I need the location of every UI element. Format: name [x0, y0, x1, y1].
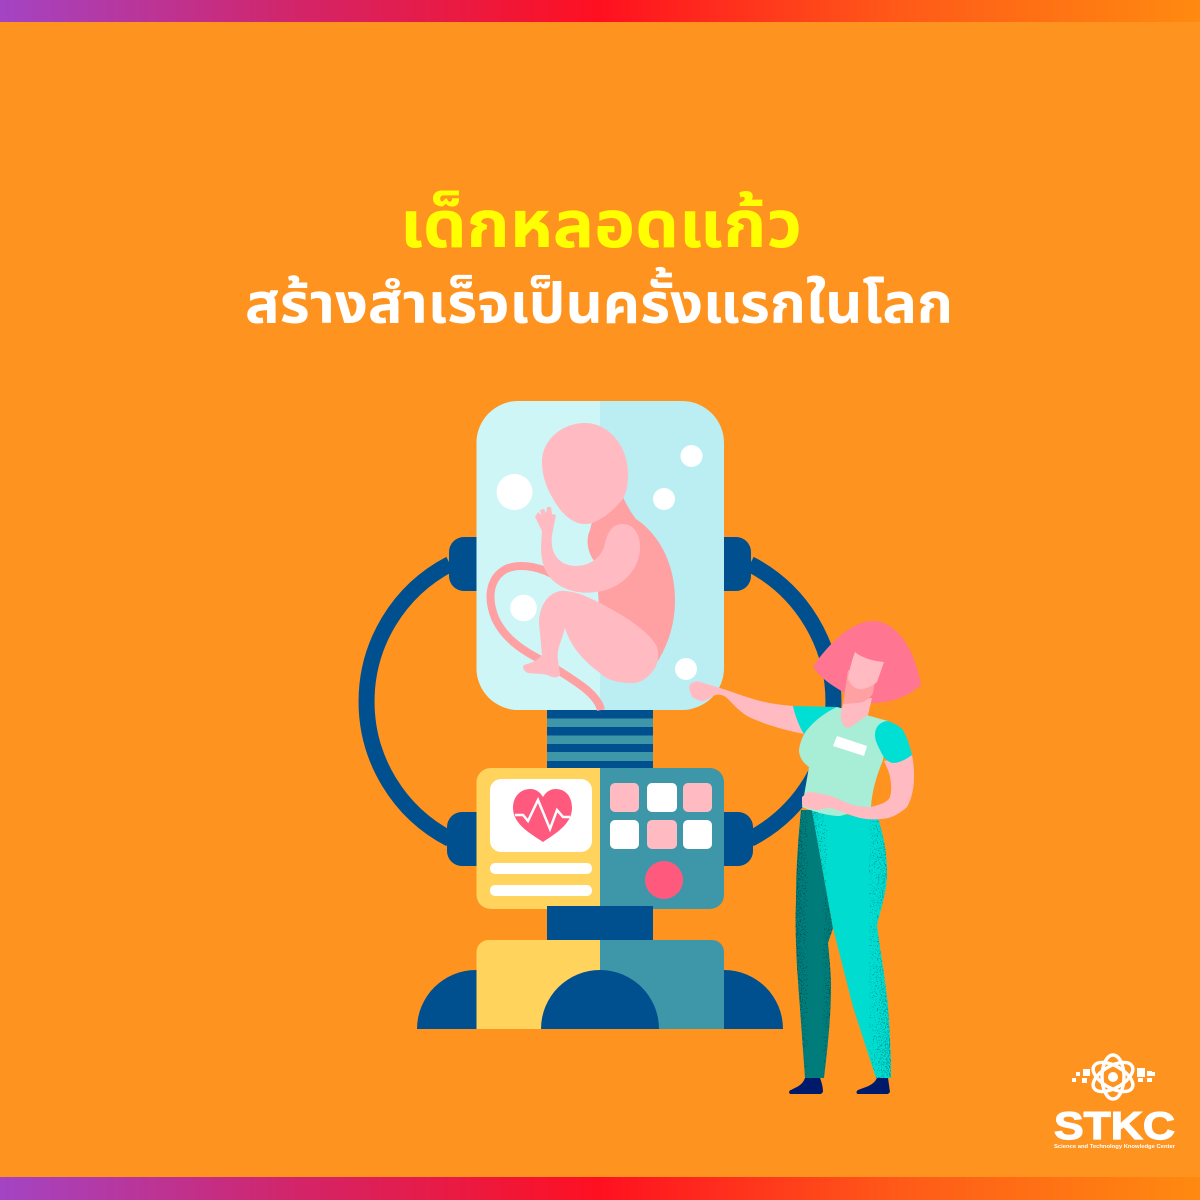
control panel	[476, 768, 724, 909]
hair	[813, 621, 921, 703]
monitor screen with heart	[490, 779, 592, 852]
base with domes	[417, 940, 783, 1029]
neck	[841, 698, 872, 728]
name badge	[833, 736, 867, 756]
readout lines	[490, 863, 592, 896]
logo atom mark	[1088, 1055, 1138, 1099]
pointing arm	[689, 681, 804, 734]
face	[848, 652, 884, 689]
neck shadow	[843, 670, 877, 704]
right arm on hip	[802, 755, 914, 819]
STKC logo	[1054, 1055, 1176, 1150]
ring connectors	[447, 537, 753, 866]
shirt	[799, 707, 888, 816]
red button	[645, 861, 683, 899]
logo pixel dots	[1072, 1068, 1155, 1083]
fetus	[491, 423, 675, 710]
torso	[588, 490, 675, 664]
logo tagline: Science and Technology Knowledge Center	[1054, 1144, 1176, 1150]
incubator machine illustration	[367, 401, 833, 1029]
subtitle: white heading: สร้างสำเร็จเป็นครั้งแรกในโลก	[245, 266, 953, 335]
keypad buttons	[610, 783, 712, 849]
top gradient bar	[0, 0, 1200, 22]
left sleeve	[793, 706, 837, 734]
lower column	[547, 906, 653, 940]
umbilical cord	[491, 566, 601, 710]
right sleeve	[875, 721, 912, 763]
trousers	[796, 810, 891, 1078]
woman scientist	[689, 621, 921, 1094]
shoes	[789, 1078, 890, 1094]
leg and foot	[523, 591, 658, 683]
bottom gradient bar	[0, 1177, 1200, 1200]
title: yellow heading: เด็กหลอดแก้ว	[400, 187, 802, 261]
glass tank	[476, 401, 724, 710]
arm and hand	[535, 507, 640, 593]
striped neck	[547, 710, 653, 769]
support ring arcs	[367, 564, 833, 839]
bubbles	[496, 445, 702, 680]
head	[542, 423, 628, 524]
logo wordmark: STKC	[1054, 1105, 1175, 1148]
